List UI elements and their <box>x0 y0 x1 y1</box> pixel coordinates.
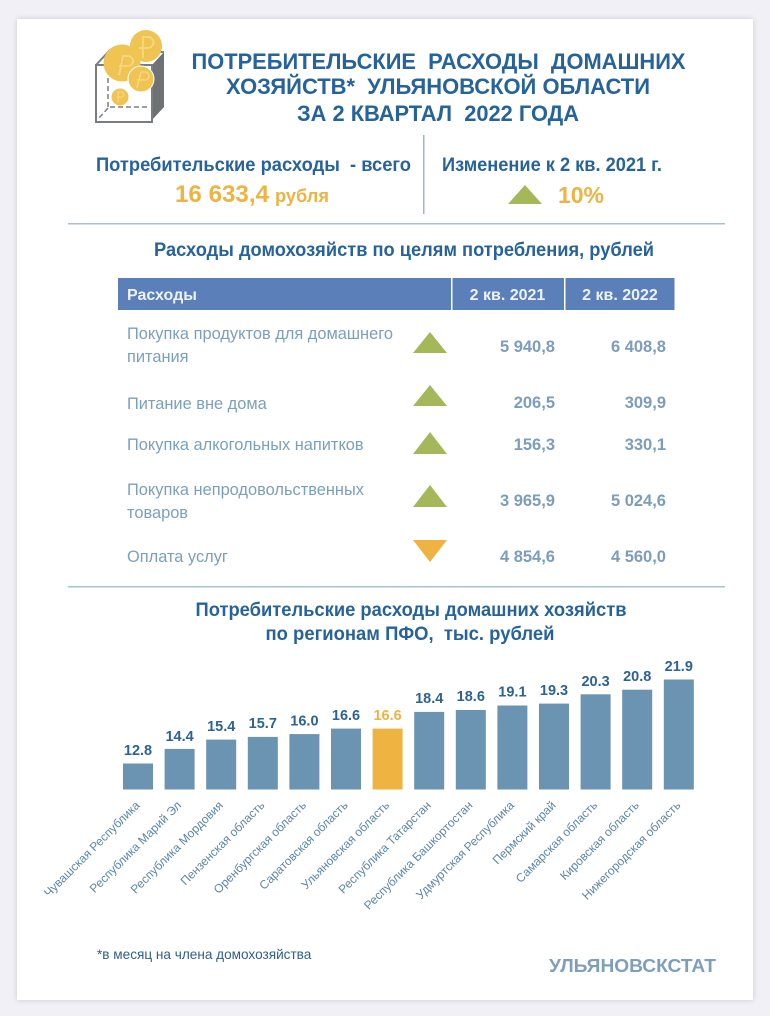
table row: food at home: 5 940,8 <box>500 338 555 356</box>
section divider <box>68 586 725 588</box>
bar values: 14.4 <box>165 729 194 745</box>
table row: services: 4 854,6 <box>500 548 555 566</box>
table row: non-food goods <box>127 481 666 522</box>
table row: services: 4 560,0 <box>611 548 666 566</box>
heading: regions <box>196 600 626 645</box>
change block: 10% <box>558 182 604 208</box>
table row: alcohol: 330,1 <box>625 436 666 454</box>
bar values: 18.4 <box>415 691 443 707</box>
table header: Расходы <box>127 287 197 304</box>
bar values: 15.7 <box>249 716 277 732</box>
region labels: Удмуртская Республика <box>413 798 517 902</box>
bar values: 19.3 <box>540 683 568 699</box>
region labels: Пензенская область <box>178 798 267 888</box>
title: ПОТРЕБИТЕЛЬСКИЕ РАСХОДЫ ДОМАШНИХ <box>192 49 686 74</box>
region labels: Ульяновская область <box>298 798 392 892</box>
region labels: Республика Мордовия <box>128 798 226 896</box>
region labels: Республика Татарстан <box>336 798 434 896</box>
table row: eating out: Питание вне дома <box>127 395 268 413</box>
vertical divider <box>423 135 424 214</box>
table row: eating out: 206,5 <box>514 394 555 412</box>
table header: 2 кв. 2022 <box>582 287 658 304</box>
bar values: 15.4 <box>207 719 235 735</box>
table row: services: Оплата услуг <box>127 548 228 566</box>
region labels: Самарская область <box>513 798 600 886</box>
total expenses block <box>96 155 411 208</box>
region labels: Пермский край <box>490 798 559 867</box>
table header <box>118 278 674 310</box>
region labels <box>41 798 683 913</box>
table row: non-food goods: 3 965,9 <box>500 492 555 510</box>
title: ЗА 2 КВАРТАЛ 2022 ГОДА <box>297 101 579 126</box>
table row: food at home: 6 408,8 <box>611 338 666 356</box>
bar values: 12.8 <box>124 743 152 759</box>
section divider <box>68 223 725 224</box>
bar values: 19.1 <box>498 684 527 700</box>
region labels: Оренбургская область <box>211 798 309 897</box>
table row: food at home <box>127 325 666 366</box>
total expenses block: 16 633,4 <box>175 181 270 208</box>
table row: non-food goods: товаров <box>127 504 188 522</box>
table row: alcohol: 156,3 <box>514 436 555 454</box>
table row: services <box>127 540 666 566</box>
region labels: Кировская область <box>557 798 642 883</box>
heading: regions: Потребительские расходы домашних хозяйств <box>196 600 626 621</box>
region labels: Саратовская область <box>256 798 351 892</box>
table row: non-food goods: Покупка непродовольственных <box>127 481 365 499</box>
heading: regions: по регионам ПФО, тыс. рублей <box>266 624 554 645</box>
table row: alcohol: Покупка алкогольных напитков <box>127 436 364 454</box>
bar values: 16.6 <box>373 708 402 724</box>
bar values: 21.9 <box>665 659 693 675</box>
table row: non-food goods: 5 024,6 <box>611 492 666 510</box>
bar values <box>124 659 693 759</box>
heading: expenses by purpose: Расходы домохозяйств по целям потребления, рублей <box>154 240 654 261</box>
table header: 2 кв. 2021 <box>470 287 545 304</box>
total expenses block: Потребительские расходы - всего <box>96 155 411 176</box>
table row: food at home: питания <box>127 348 189 366</box>
bar values: 18.6 <box>457 689 485 705</box>
title <box>192 49 686 126</box>
bars <box>123 680 694 790</box>
footnote: *в месяц на члена домохозяйства <box>97 947 312 962</box>
title: ХОЗЯЙСТВ* УЛЬЯНОВСКОЙ ОБЛАСТИ <box>226 74 650 99</box>
region labels: Чувашская Республика <box>41 798 143 900</box>
table row: eating out <box>127 385 666 413</box>
change block <box>442 155 662 208</box>
region labels: Республика Марий Эл <box>87 798 184 896</box>
bar values: 20.8 <box>623 669 651 685</box>
table row: food at home: Покупка продуктов для домашнего <box>127 325 393 343</box>
bar values: 16.6 <box>332 708 360 724</box>
bar values: 16.0 <box>290 714 319 730</box>
bar values: 20.3 <box>581 674 610 690</box>
table row: alcohol <box>127 432 666 454</box>
brand: УЛЬЯНОВСКСТАТ <box>549 955 717 976</box>
region labels: Республика Башкортостан <box>361 798 475 913</box>
bar chart <box>41 659 694 913</box>
icon: coins dropping into box <box>96 30 164 122</box>
change block: Изменение к 2 кв. 2021 г. <box>442 155 662 176</box>
total expenses block: рубля <box>275 186 329 206</box>
region labels: Нижегородская область <box>579 798 683 902</box>
table row: eating out: 309,9 <box>625 394 666 412</box>
